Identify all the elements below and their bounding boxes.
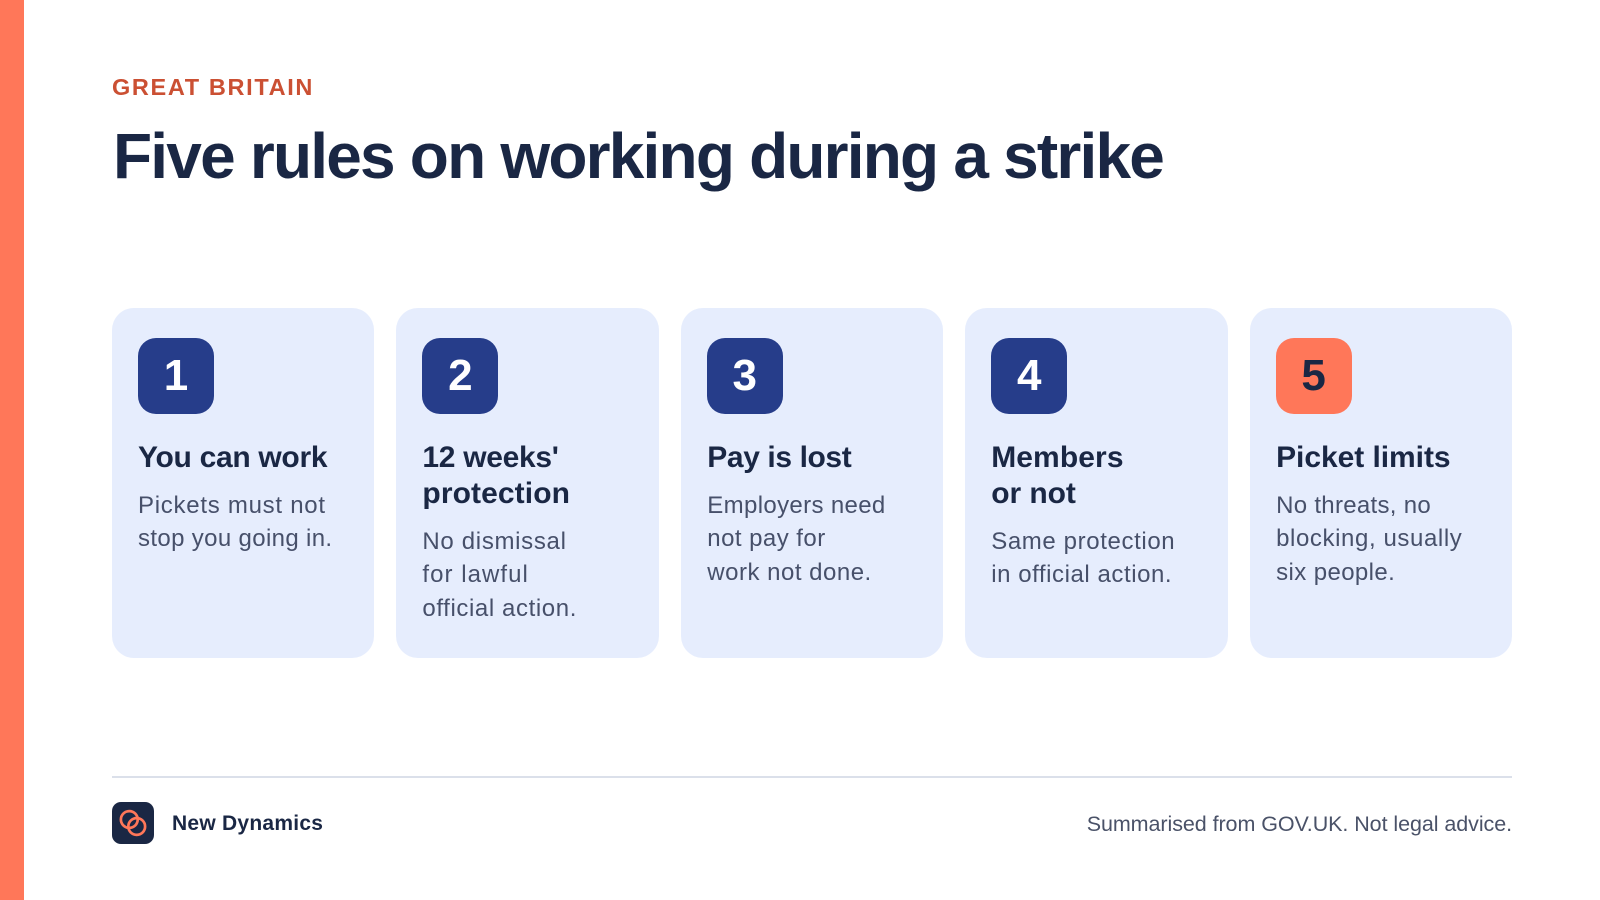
card 4 body (991, 528, 1175, 588)
card 1 body (138, 492, 332, 552)
card 2 heading: 12 weeks' (422, 441, 559, 474)
card 3 heading: Pay is lost (707, 441, 851, 474)
badge 4: 4 (1017, 351, 1041, 400)
card 5 body: six people. (1276, 558, 1395, 586)
source note: Summarised from GOV.UK. Not legal advice. (1087, 812, 1512, 836)
badge 1 (138, 338, 214, 414)
badge 3 (707, 338, 783, 414)
card 2 heading: protection (422, 477, 570, 510)
card 3 body: Employers need (707, 492, 886, 518)
panel: card 5 (1250, 308, 1512, 658)
title: Five rules on working during a strike (113, 120, 1163, 192)
card 3 body (707, 492, 886, 586)
panel: card 3 (681, 308, 943, 658)
card 5 heading: Picket limits (1276, 441, 1451, 474)
badge 2 (422, 338, 498, 414)
card 3 body: work not done. (707, 558, 872, 586)
panel: card 4 (965, 308, 1228, 658)
badge 3: 3 (733, 351, 757, 400)
panel: card 2 (396, 308, 659, 658)
card 4 heading: or not (991, 477, 1076, 510)
card 2 body: No dismissal (422, 528, 567, 554)
icon: New Dynamics logo (112, 802, 154, 844)
card 1 body: Pickets must not (138, 492, 326, 518)
card 2 body (422, 528, 577, 622)
accent stripe (0, 0, 24, 900)
card 4 body: in official action. (991, 561, 1172, 588)
card 4 heading: Members (991, 441, 1124, 474)
badge 5 (1276, 338, 1352, 414)
badge 2: 2 (448, 351, 473, 400)
card 3 body: not pay for (707, 525, 826, 552)
card 2 heading (422, 441, 570, 510)
card 5 body: No threats, no (1276, 492, 1431, 518)
badge 5: 5 (1301, 351, 1326, 400)
eyebrow: GREAT BRITAIN (112, 74, 314, 100)
card 5 body (1276, 492, 1462, 586)
card 1 heading: You can work (138, 441, 327, 474)
brand name: New Dynamics (172, 812, 323, 835)
card 2 body: official action. (422, 594, 577, 622)
card 1 body: stop you going in. (138, 525, 332, 552)
card 2 body: for lawful (422, 561, 529, 588)
card 5 body: blocking, usually (1276, 525, 1462, 552)
badge 1: 1 (164, 351, 188, 400)
panel: card 1 (112, 308, 374, 658)
card 4 heading (991, 441, 1124, 510)
card 4 body: Same protection (991, 528, 1175, 554)
badge 4 (991, 338, 1067, 414)
